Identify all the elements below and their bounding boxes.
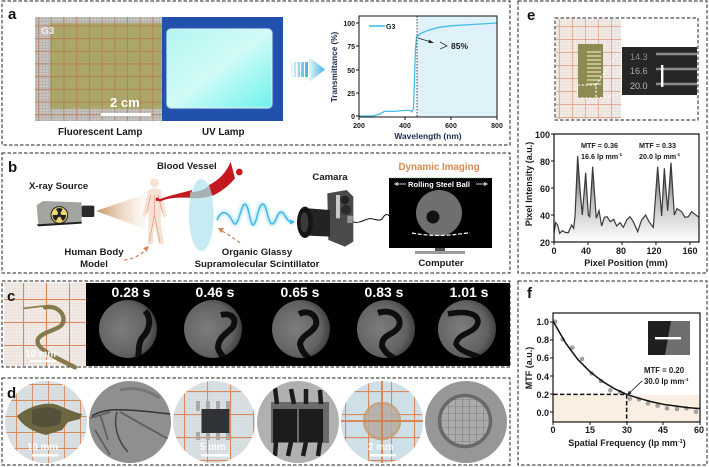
inset: line pair card [555,18,698,120]
chart: pixel intensity: 40 [581,246,591,256]
chart: transmittance vs wavelength: 200 [353,123,365,130]
arrow: to body [124,246,149,260]
panel d: objects and x-ray images [2,378,510,465]
frame 1.01 s: 1.01 s [450,284,489,300]
inset: line pair card: 14.3 [630,52,648,62]
icon: X-ray source [37,201,94,226]
chart: pixel intensity [524,130,699,268]
arrow: to scintillator [218,228,240,243]
chart: transmittance vs wavelength: 400 [399,123,411,130]
chart: pixel intensity: 60 [540,184,550,194]
frame 0.28 s [99,284,157,362]
arrow to chart [291,57,325,82]
chart: MTF vs spatial frequency: 0.4 [536,372,549,382]
panel label b: b [8,159,17,176]
chart: MTF vs spatial frequency [524,313,704,448]
panel c: rolling bird time series [2,281,510,367]
chart: MTF vs spatial frequency: ) [683,438,686,448]
photo: fluorescent lamp: 2 cm [110,95,140,110]
photo: fish: 10 mm [27,442,58,453]
icon: scintillator lens with blood vessel [157,162,243,251]
wave: emitted light [217,204,295,225]
photo: metal bird [4,283,86,367]
chart: pixel intensity: 0 [551,246,557,256]
chart: MTF vs spatial frequency: 15 [585,425,595,435]
steel ball [416,190,462,236]
frame 0.46 s: 0.46 s [196,284,235,300]
label: computer: Computer [418,258,464,269]
photo: metal bird: 10 mm [25,349,56,360]
inset: line pair card: 16.6 [630,66,648,76]
chart: pixel intensity: 80 [540,157,550,167]
chart: transmittance vs wavelength: Wavelength (nm) [394,131,462,141]
chart: MTF vs spatial frequency: Spatial Frequency (lp mm [568,438,678,448]
chart: MTF vs spatial frequency: 0.2 [536,390,549,400]
chart: transmittance vs wavelength: 85% [451,41,468,51]
chart: transmittance vs wavelength [330,16,503,141]
panel label d: d [7,385,16,402]
panel label c: c [7,288,15,305]
label: scintillator: Organic Glassy [222,247,293,258]
chart: pixel intensity: 16.6 lp mm [581,152,618,161]
frame 0.83 s [357,284,415,362]
photo: fluorescent lamp: G3 [41,26,55,37]
frame 0.46 s [184,284,242,362]
monitor caption: Rolling Steel Ball [408,180,470,189]
chart: pixel intensity: 40 [540,211,550,221]
chart: transmittance vs wavelength: G3 [386,24,395,31]
x-ray image sequence [86,283,510,366]
chart: MTF vs spatial frequency: -1 [684,377,689,383]
label: human body model: Human Body [64,247,124,258]
chart: pixel intensity: Pixel Position (mm) [584,258,668,268]
chart: transmittance vs wavelength: 50 [347,68,355,75]
x-ray cone [96,194,145,229]
caption: fluorescent lamp: Fluorescent Lamp [58,127,142,138]
chart: transmittance vs wavelength: Transmittance (%) [330,31,339,102]
chart: MTF vs spatial frequency: 0.0 [536,408,549,418]
panel label a: a [8,6,17,23]
chart: MTF vs spatial frequency: 1.0 [536,317,549,327]
chart: MTF vs spatial frequency: 60 [694,425,704,435]
inset: line pair card: 20.0 [630,81,648,91]
panel b: dynamic imaging schematic [2,153,510,273]
chart: transmittance vs wavelength: 75 [347,44,355,51]
chart: pixel intensity: 100 [535,130,550,140]
photo: fish [5,381,87,463]
label: model: Model [80,259,108,270]
panel label f: f [527,285,533,302]
frame 1.01 s [438,284,496,358]
x-ray: mesh [425,381,507,463]
icon: monitor [389,178,492,254]
photo: chip: 5 mm [200,442,226,453]
label: supramolecular scintillator: Supramolecular Scintillator [195,259,320,270]
inset: edge image [648,321,690,355]
chart: pixel intensity: MTF = 0.33 [639,141,676,150]
caption arrows [395,182,487,186]
chart: pixel intensity: Pixel Intensity (a.u.) [524,142,534,226]
icon: human body model [142,178,167,244]
chart: transmittance vs wavelength: 600 [445,123,457,130]
label: camera: Camara [312,172,348,183]
frame 0.65 s: 0.65 s [281,284,320,300]
panel f: MTF curve [518,281,707,465]
motion arrow [412,232,470,235]
chart: transmittance vs wavelength: 100 [343,21,355,28]
panel a: G3 scintillator photos and transmittance [2,1,510,145]
chart: MTF vs spatial frequency: MTF (a.u.) [524,347,534,389]
photo: UV lamp [162,17,283,121]
chart: MTF vs spatial frequency: 30.0 lp mm [644,377,684,386]
chart: MTF vs spatial frequency: 0.6 [536,353,549,363]
panel label e: e [527,7,535,24]
chart: pixel intensity: MTF = 0.36 [581,141,618,150]
chart: pixel intensity: -1 [618,152,623,157]
chart: pixel intensity: 20 [540,238,550,248]
chart: MTF vs spatial frequency: 45 [658,425,668,435]
photo: copper mesh: 2 mm [368,442,394,453]
chart: transmittance vs wavelength: 800 [491,123,503,130]
label: dynamic imaging: Dynamic Imaging [398,162,480,173]
label: blood vessel: Blood Vessel [157,161,217,172]
frame 0.28 s: 0.28 s [112,284,151,300]
chart: MTF vs spatial frequency: 0.8 [536,335,549,345]
panel e: resolution test [518,1,707,273]
cable [353,214,389,222]
label: X-ray source: X-ray Source [29,181,88,192]
frame 0.65 s [272,284,330,362]
chart: MTF vs spatial frequency: 30 [622,425,632,435]
photo: copper mesh [341,381,423,463]
photo: chip [173,381,255,463]
x-ray: fish [89,381,171,463]
x-ray: chip [257,381,339,463]
chart: pixel intensity: 160 [682,246,698,256]
chart: pixel intensity: -1 [676,152,681,157]
photo: fluorescent lamp [35,17,162,121]
chart: transmittance vs wavelength: 25 [347,91,355,98]
chart: pixel intensity: 20.0 lp mm [639,152,676,161]
chart: MTF vs spatial frequency: 0 [550,425,556,435]
frame 0.83 s: 0.83 s [365,284,404,300]
chart: MTF vs spatial frequency: MTF = 0.20 [644,366,685,375]
chart: MTF vs spatial frequency: -1 [678,439,683,445]
icon: camera [297,190,353,247]
chart: pixel intensity: 80 [616,246,626,256]
chart: pixel intensity: 120 [646,246,662,256]
caption: UV lamp: UV Lamp [202,127,244,138]
chart: transmittance vs wavelength: 0 [351,114,355,121]
